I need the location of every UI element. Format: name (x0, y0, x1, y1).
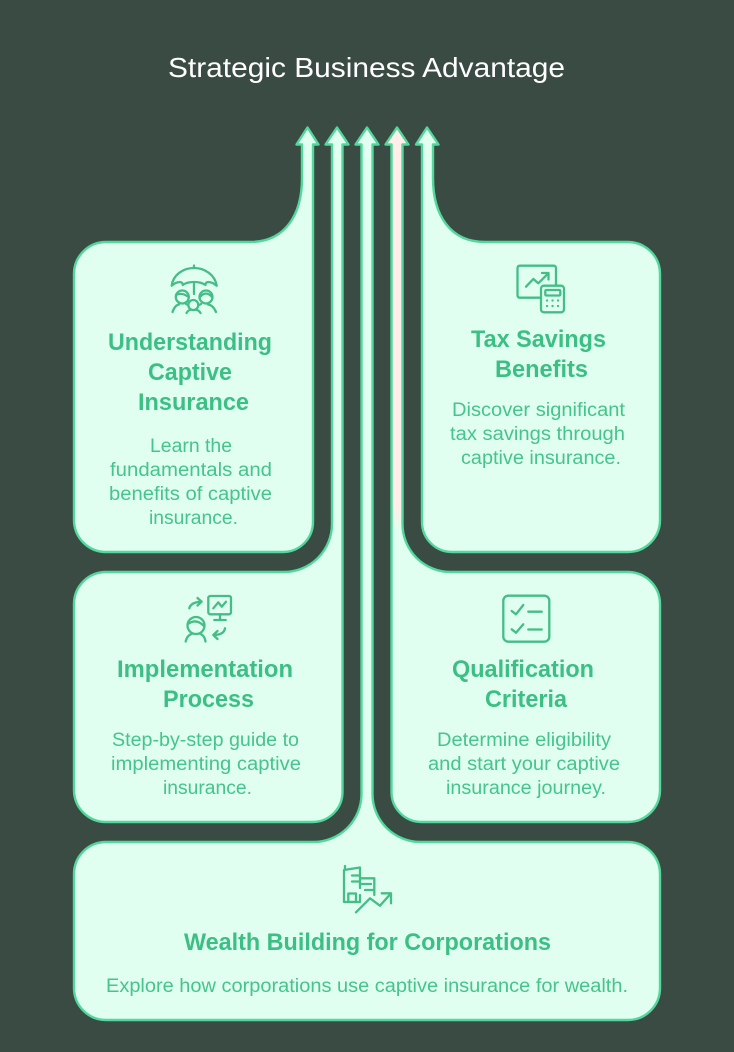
heading: qualification criteria: Criteria (485, 686, 567, 713)
text block: tax savings description: tax savings through (450, 424, 625, 445)
text block: qualification description (428, 730, 620, 799)
text block: understanding description: Learn the (150, 436, 232, 457)
text block: wealth building description: Explore how corporations use captive insurance for wealth. (106, 976, 628, 997)
text block: tax savings description: captive insurance. (461, 448, 621, 469)
heading: understanding captive insurance (108, 329, 272, 416)
heading: wealth building: Wealth Building for Corporations (184, 929, 551, 956)
text block: qualification description: insurance journey. (446, 778, 606, 799)
heading: qualification criteria (452, 656, 594, 713)
icon: checklist (503, 596, 549, 642)
icon: chart and calculator (518, 266, 564, 312)
text block: tax savings description: Discover significant (452, 400, 626, 421)
text block: understanding description: insurance. (149, 508, 238, 529)
text block: implementation description: Step-by-step guide to (112, 730, 299, 751)
icon: person and presentation (186, 596, 231, 642)
title: Strategic Business Advantage (168, 52, 565, 83)
panel: understanding captive insurance (74, 128, 318, 552)
heading: qualification criteria: Qualification (452, 656, 594, 683)
icon: buildings and growth arrow (344, 866, 391, 912)
text block: tax savings description (450, 400, 626, 469)
text block: understanding description: benefits of captive (109, 484, 272, 505)
heading: understanding captive insurance: Understanding (108, 329, 272, 356)
heading: implementation process: Implementation (117, 656, 293, 683)
heading: implementation process (117, 656, 293, 713)
panel: qualification criteria (386, 128, 660, 822)
text block: understanding description (109, 436, 272, 529)
text block: implementation description: insurance. (163, 778, 252, 799)
panel: tax savings benefits (416, 128, 660, 552)
text block: qualification description: and start your captive (428, 754, 620, 775)
heading: tax savings benefits (471, 326, 606, 383)
text block: implementation description: implementing captive (111, 754, 301, 775)
heading: understanding captive insurance: Insurance (138, 389, 249, 416)
icon: umbrella over people (172, 266, 217, 313)
heading: understanding captive insurance: Captive (148, 359, 232, 386)
heading: tax savings benefits: Benefits (495, 356, 588, 383)
text block: implementation description (111, 730, 301, 799)
text block: understanding description: fundamentals and (110, 460, 272, 481)
panel: wealth building for corporations (74, 128, 660, 1020)
text block: qualification description: Determine eligibility (437, 730, 612, 751)
heading: tax savings benefits: Tax Savings (471, 326, 606, 353)
panel: implementation process (74, 128, 348, 822)
heading: implementation process: Process (163, 686, 254, 713)
